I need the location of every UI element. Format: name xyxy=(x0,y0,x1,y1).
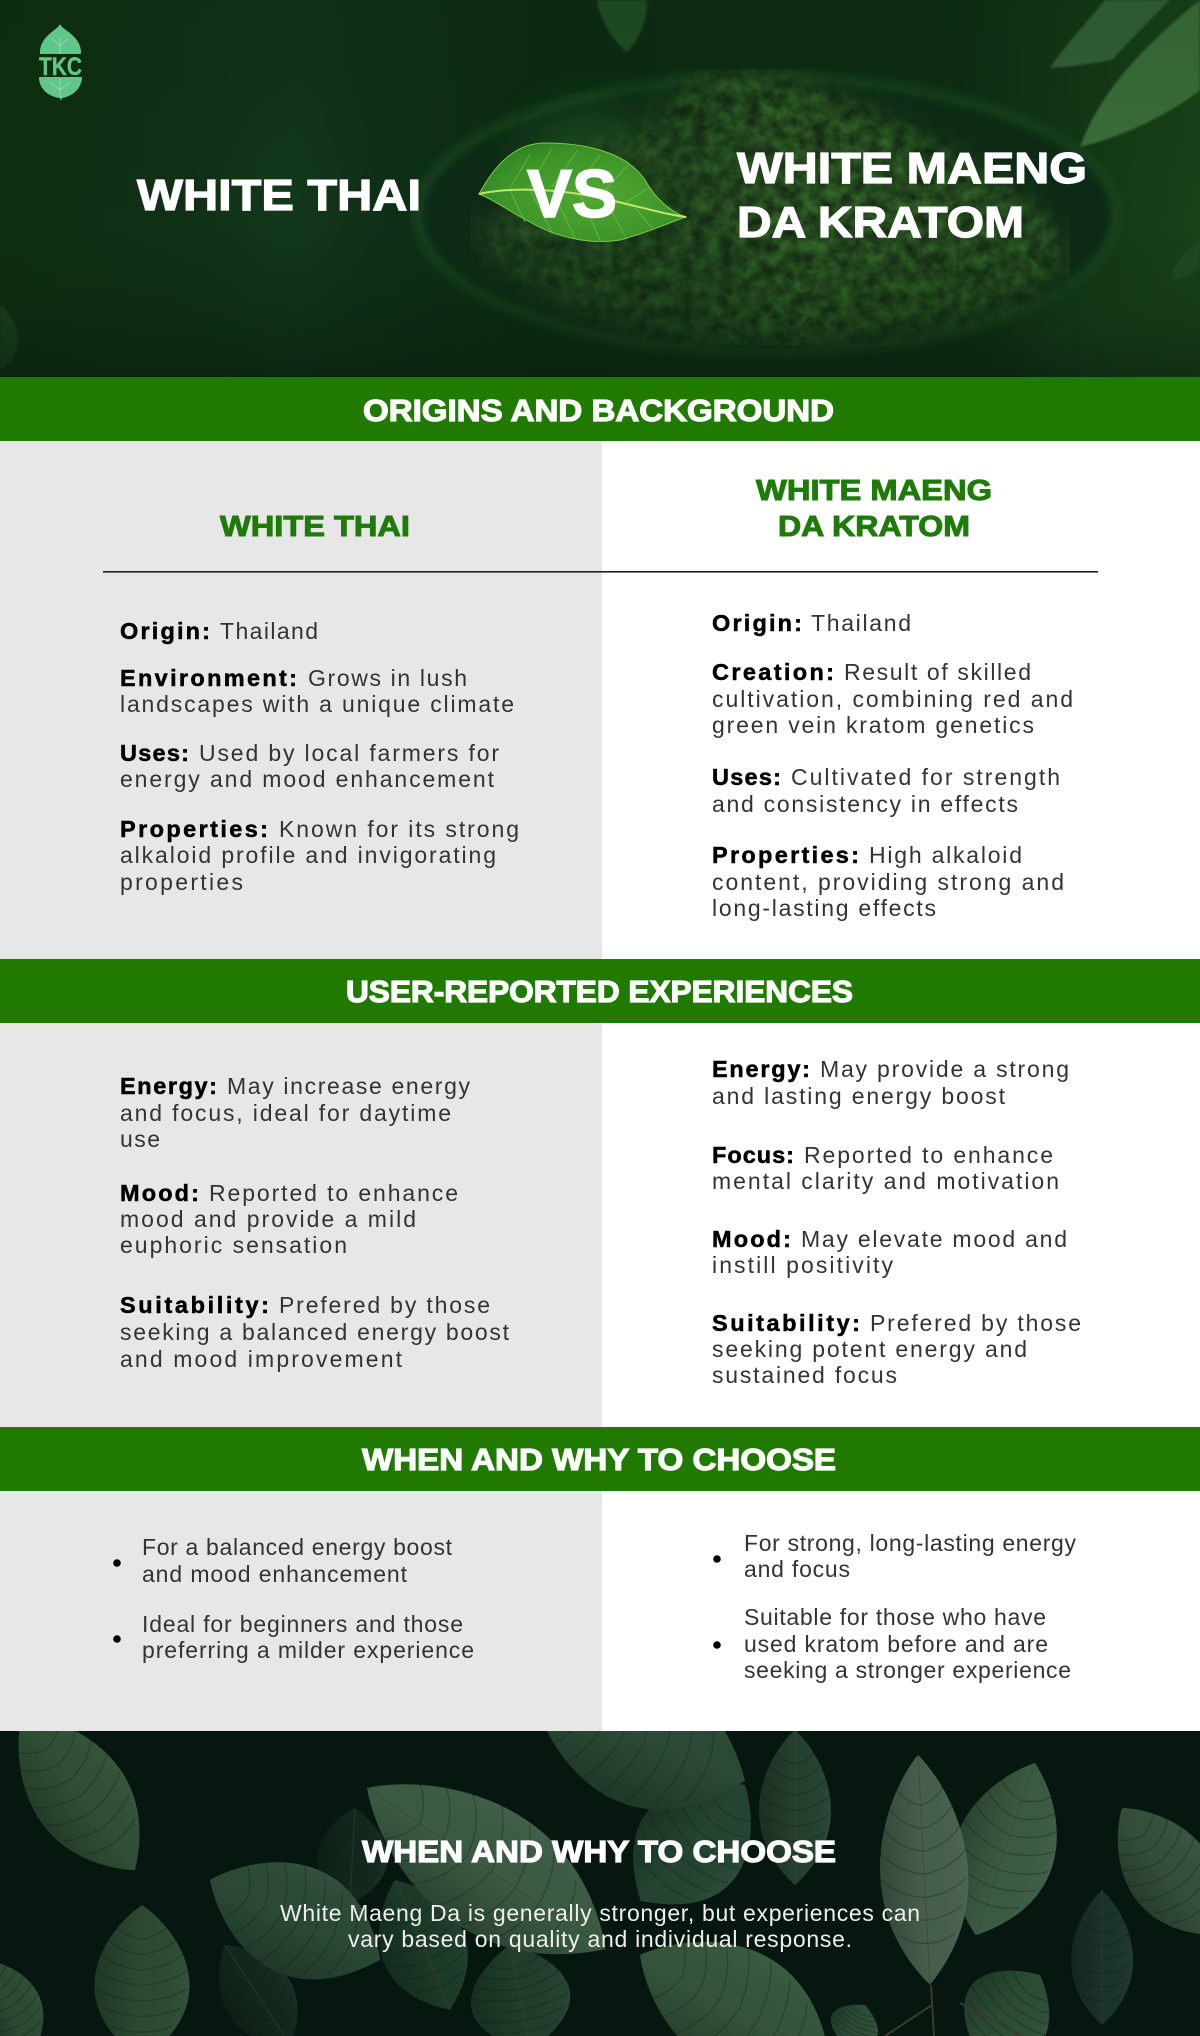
item: suitability: seeking potent energy and xyxy=(712,1336,1027,1362)
bullet: balanced energy: and mood enhancement xyxy=(142,1561,408,1587)
bullet: strong energy: For strong, long-lasting energy xyxy=(744,1530,1076,1556)
panel: white thai origins xyxy=(0,441,602,959)
item: energy: Energy: xyxy=(712,1056,810,1082)
item: uses: Uses: xyxy=(120,740,189,766)
section band: origins and background: ORIGINS AND BACKGROUND xyxy=(363,393,834,428)
item: environment: Grows in lush xyxy=(308,665,467,691)
item: energy: use xyxy=(120,1126,160,1152)
bullet: experienced users: seeking a stronger experience xyxy=(744,1657,1071,1683)
section band: user-reported experiences: USER-REPORTED EXPERIENCES xyxy=(346,974,853,1009)
item: suitability: sustained focus xyxy=(712,1362,897,1388)
section band: when and why to choose: WHEN AND WHY TO CHOOSE xyxy=(362,1442,836,1477)
item: mood: Mood: xyxy=(120,1180,199,1206)
item: environment xyxy=(120,665,514,717)
item: suitability: Prefered by those xyxy=(870,1310,1081,1336)
item: energy: May increase energy xyxy=(227,1073,470,1099)
item: suitability: seeking a balanced energy boost xyxy=(120,1319,510,1345)
logo: TKC leaf xyxy=(39,24,82,101)
footer panel xyxy=(0,1731,1200,2036)
panel: white maeng da experiences xyxy=(602,1023,1200,1427)
bullet: beginners xyxy=(113,1611,474,1663)
item: mood: instill positivity xyxy=(712,1252,894,1278)
bullet: beginners: Ideal for beginners and those xyxy=(142,1611,463,1637)
item: properties: alkaloid profile and invigorating xyxy=(120,842,496,868)
item: environment: Environment: xyxy=(120,665,297,691)
title: white maeng da kratom: DA KRATOM xyxy=(737,198,1024,247)
item: focus: mental clarity and motivation xyxy=(712,1168,1059,1194)
item: suitability: Suitability: xyxy=(712,1310,860,1336)
item: origin: Thailand xyxy=(811,610,911,636)
bullet: experienced users: Suitable for those who have xyxy=(744,1604,1046,1630)
heading: white maeng da kratom: WHITE MAENG xyxy=(756,475,992,507)
bullet: beginners: preferring a milder experience xyxy=(142,1637,474,1663)
photo: dark leaves background xyxy=(0,1731,1200,2036)
panel: white thai experiences xyxy=(0,1023,602,1427)
item: creation: cultivation, combining red and xyxy=(712,686,1073,712)
item: properties: long-lasting effects xyxy=(712,895,936,921)
panel: white thai when to choose xyxy=(0,1491,602,1731)
item: origin xyxy=(120,618,318,644)
item: uses xyxy=(120,740,499,792)
hero banner xyxy=(0,0,1200,400)
section band: user-reported experiences xyxy=(0,959,1200,1023)
footer text: White Maeng Da is generally stronger, but experiences can xyxy=(280,1900,920,1926)
item: suitability xyxy=(120,1292,510,1372)
item: energy: and lasting energy boost xyxy=(712,1083,1006,1109)
divider under column headings xyxy=(103,571,1098,573)
item: mood: mood and provide a mild xyxy=(120,1206,416,1232)
heading: white maeng da kratom: DA KRATOM xyxy=(778,511,970,543)
title: white thai: WHITE THAI xyxy=(137,171,421,220)
item: mood xyxy=(712,1226,1067,1278)
photo: blurred background leaves xyxy=(0,0,1200,370)
item: creation xyxy=(712,659,1073,738)
item: creation: Result of skilled xyxy=(844,659,1031,685)
item: mood: Reported to enhance xyxy=(209,1180,458,1206)
item: energy: and focus, ideal for daytime xyxy=(120,1100,451,1126)
footer heading: WHEN AND WHY TO CHOOSE xyxy=(362,1834,836,1869)
footer text xyxy=(280,1900,920,1952)
item: energy: Energy: xyxy=(120,1073,217,1099)
item: origin: Thailand xyxy=(220,618,318,644)
item: suitability: and mood improvement xyxy=(120,1346,403,1372)
panel: white maeng da when to choose xyxy=(602,1491,1200,1731)
item: focus: Reported to enhance xyxy=(804,1142,1053,1168)
item: energy: May provide a strong xyxy=(820,1056,1069,1082)
icon: green leaf with VS xyxy=(479,143,686,241)
item: properties xyxy=(712,842,1064,921)
item: uses: energy and mood enhancement xyxy=(120,766,495,792)
item: energy xyxy=(712,1056,1069,1109)
item: origin: Origin: xyxy=(120,618,210,644)
item: uses: Uses: xyxy=(712,764,781,790)
item: properties xyxy=(120,816,519,895)
heading: white thai: WHITE THAI xyxy=(220,511,410,543)
item: uses: Used by local farmers for xyxy=(199,740,499,766)
item: properties: properties xyxy=(120,869,243,895)
item: mood: euphoric sensation xyxy=(120,1232,347,1258)
item: energy xyxy=(120,1073,470,1152)
icon: green leaf with VS: VS xyxy=(527,156,617,232)
item: suitability xyxy=(712,1310,1081,1388)
panel: white maeng da origins xyxy=(602,441,1200,959)
item: properties: High alkaloid xyxy=(869,842,1022,868)
item: uses xyxy=(712,764,1060,817)
item: properties: Properties: xyxy=(120,816,268,842)
item: properties: content, providing strong and xyxy=(712,869,1064,895)
item: creation: Creation: xyxy=(712,659,834,685)
item: mood: May elevate mood and xyxy=(801,1226,1067,1252)
item: mood: Mood: xyxy=(712,1226,791,1252)
section band: origins and background xyxy=(0,377,1200,441)
item: mood xyxy=(120,1180,458,1258)
item: environment: landscapes with a unique climate xyxy=(120,691,514,717)
item: suitability: Prefered by those xyxy=(279,1292,490,1318)
section band: when and why to choose xyxy=(0,1427,1200,1491)
item: suitability: Suitability: xyxy=(120,1292,269,1318)
title: white maeng da kratom xyxy=(736,152,1085,238)
bullet: experienced users: used kratom before and are xyxy=(744,1631,1048,1657)
bullet: balanced energy xyxy=(113,1534,453,1587)
heading: white maeng da kratom xyxy=(756,475,992,543)
item: focus xyxy=(712,1142,1059,1194)
item: properties: Known for its strong xyxy=(279,816,519,842)
item: focus: Focus: xyxy=(712,1142,794,1168)
item: uses: and consistency in effects xyxy=(712,791,1018,817)
bullet: experienced users xyxy=(713,1604,1071,1683)
logo: TKC leaf: TKC xyxy=(39,53,82,81)
item: properties: Properties: xyxy=(712,842,859,868)
photo: bowl of powder xyxy=(417,70,1117,353)
bullet: strong energy xyxy=(713,1530,1076,1582)
footer text: vary based on quality and individual response. xyxy=(348,1926,852,1952)
bullet: strong energy: and focus xyxy=(744,1556,850,1582)
item: origin xyxy=(712,610,911,636)
item: uses: Cultivated for strength xyxy=(791,764,1060,790)
title: white maeng da kratom: WHITE MAENG xyxy=(737,144,1087,193)
item: creation: green vein kratom genetics xyxy=(712,712,1034,738)
bullet: balanced energy: For a balanced energy boost xyxy=(142,1534,453,1560)
item: origin: Origin: xyxy=(712,610,802,636)
